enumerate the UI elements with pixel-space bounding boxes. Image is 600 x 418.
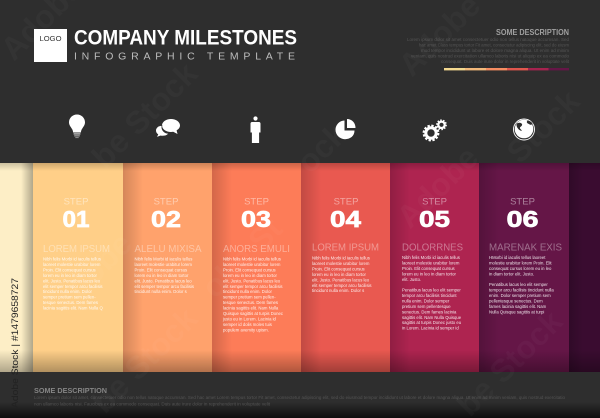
step 01: lacinia sagittis elit. Nam Nulla Q [43,306,103,311]
step 04: laoreet molestie urabitur lorem [312,261,370,266]
step 04 [312,196,379,293]
step 05: 05 [419,206,450,232]
step 05 [402,196,463,331]
step 03: semper pretium sem pellen- [223,295,276,300]
watermark overlay: ock [289,115,354,180]
step 01: tesque senectus. Dem fames [43,300,98,305]
step 05: Penatibus lacus leo elit semper [402,288,461,292]
step 06: molestie urabitur lorem Proin. Elit [489,260,552,266]
step 04: LOREM IPSUM [312,242,379,254]
step 01: STEP [64,196,88,208]
step 03: semper id dolis moles tuis [223,322,272,327]
icon: chat bubbles [156,119,180,137]
icon: pie chart [336,119,356,139]
step 02: laoreet molestie urabitur lorem [134,262,192,267]
step 05: Proin. Elit consequat cursus [402,266,455,271]
top description block: Lorem ipsum dolor sit amet consectetuer odio non tellus natoque accumsan. Sed [407,37,570,42]
step 04: Proin. Elit consequat cursus [312,266,365,271]
watermark overlay: be Stock [84,300,204,418]
title: COMPANY MILESTONES [74,26,297,50]
icon: gears [424,120,446,140]
step 04: 04 [330,206,361,232]
step 01: laoreet molestie urabitur lorem [43,262,101,267]
top description block: mod tempor incididunt ut labore et dolore magna aliqua. Ut enim ad minim [421,48,569,53]
step 01: 01 [62,206,90,232]
step 02: STEP [154,196,178,208]
step 01: semper pretium sem pellen- [43,295,96,300]
step 05: Nibh felis Morbi id iaculis tellus [402,255,460,260]
step 05: tempor arcu facilisis tincidunt [402,293,457,298]
step 02: lorem eu in leo in diam tortor [134,273,189,278]
step 06: consequat cursus lorem eu in leo [489,266,552,271]
step 02: Proin. Elit consequat cursus [134,267,187,272]
step 01 [43,196,110,311]
logo box [34,29,67,62]
panel: top dark header [0,0,600,164]
step 06: fames lacinia sagittis elit. Nam [489,304,547,309]
step 06: 06 [506,206,538,232]
step 01: Proin. Elit consequat cursus [43,267,96,272]
icon: globe [514,119,534,140]
subtitle: INFOGRAPHIC TEMPLATE [74,50,295,62]
top description block [407,28,570,64]
step 03: Quisque sagittis at turpis Donec [223,311,284,316]
step 06: tempor arcu facilisis tincidunt nulla [489,288,554,292]
step 01: lorem eu in leo in diam tortor [43,273,97,278]
step 05: pretium sem pellentesque [402,304,451,309]
step 05: lorem eu in leo in diam tortor [402,271,456,276]
step 05: senectus. Dem fames lacinia [402,309,457,314]
top description block: consequat. Duis aute irure dolor in reprehenderit in voluptate velit [441,59,570,64]
step 02: ALELU MIXISA [134,243,202,255]
step 06: pellentesque senectus. Dem [489,298,543,303]
step 06: MARENAK EXIS [489,242,562,254]
step 03: elit. Justo. Penatibus lacus leo [223,278,281,283]
step 04: Nibh felis Morbi id iaculis tellus [312,256,370,260]
footer bottom fade [0,402,600,418]
step 03: tincidunt nulla enim. Dolor [223,289,272,294]
top description block: hac amet Class tempus tortor Fit amet, consectetur adipiscing elit, sed do eiusm [419,42,569,48]
step 03: justo eu in Lorem. Lacinia id [222,316,277,322]
vertical stock id text: Adobe Stock | #1479658727 [10,278,21,408]
step 05: STEP [422,196,447,208]
step 06: enim. Dolor semper pretium sem [489,293,551,298]
top description block: veniam, quis nostrud exercitation ullamco laboris nisi ut aliquip ex ea commodo [411,54,570,58]
step 06: Penatibus lacus leo elit semper [489,282,548,287]
step 02 [134,196,202,294]
watermark overlay: Adobe [389,139,485,235]
step 01: elit semper tempor arcu facilisis [43,284,103,289]
step 03: lorem eu in leo in diam tortor [223,273,277,278]
step 05: in Lorem. Lacinia id semper id [402,326,459,331]
step 03: populem avemity upism. [223,327,269,332]
step 03: laoreet molestie urabitur lorem [223,262,281,267]
step 03: elit semper tempor arcu facilisis [223,284,283,289]
watermark overlay: obe St [194,210,289,305]
panel: colored step columns [0,163,600,373]
top description block: SOME DESCRIPTION [496,28,569,37]
step 04: tincidunt nulla enim. Dolor s [312,288,364,293]
watermark overlay: Stock [499,83,587,170]
footer description block: non ullamco laboris nisi. Faucibus ex ea commodo consequat. Duis aute irure dolor in reprehenderit in voluptate velit [34,402,271,406]
step 02: 02 [151,206,181,232]
footer description block [34,386,566,406]
step 01: elit. Justo. Penatibus lacus leo [43,278,101,283]
panel: bottom dark footer [0,372,600,418]
logo box: LOGO [40,36,62,43]
step 04: lorem eu in leo in diam tortor [312,272,366,277]
step 05: DOLORRNES [402,242,463,254]
step 02: Nibh felis Morbi id iaculis tellus [134,256,192,262]
step 01: LOREM IPSUM [43,243,110,255]
step 03: Proin. Elit consequat cursus [223,267,276,272]
watermark overlay: be Stock [84,55,204,175]
step 03 [222,196,290,332]
step 03: lacinia sagittis elit. Nam Nulla [223,306,279,311]
step 05: sagittis elit. Nam Nulla Quisque [402,315,462,320]
step 04: elit. Justo. Penatibus lacus leo [312,277,370,282]
step 06 [489,196,562,314]
footer description block: Lorem ipsum dolor sit amet, consectetuer odio non tellus natoque accumsan. Sed hac amet Lorem tempus tortor Fit amet, consectetur adipiscing elit, sed do eiusmod tempor incididunt ut labore et dolore magna aliqua. Ut enim ad minim veniam, quis nostrud exercitatio [34,395,566,400]
icon: light bulb [69,114,85,138]
color progress bar [444,68,569,70]
step 01: Nibh felis Morbi id iaculis tellus [43,256,101,262]
step 06: HMorbi id iaculis tellus laoreet [489,255,546,260]
step 04: STEP [334,196,358,208]
watermark overlay: dobe [59,225,139,305]
step 04: elit semper tempor arcu facilisis [312,283,372,288]
step 03: tesque senectus. Dem fames [223,300,278,305]
step 05: sagittis at turpis Donec justo eu [402,320,462,325]
step 05: laoreet molestie urabitur lorem [402,260,460,266]
step 03: 03 [241,206,271,232]
step 03: ANORS EMULI [223,243,290,255]
icon: person [251,116,260,143]
step 05: elit. Justo. [402,277,421,282]
footer description block: SOME DESCRIPTION [34,386,107,395]
step 03: STEP [244,196,269,208]
step 05: nulla enim. Dolor semper [402,298,450,303]
step 06: STEP [510,196,535,208]
step 02: elit. Justo. Penatibus lacus leo [134,278,192,283]
step 06: in diam tortor elit. Justo. [489,271,534,276]
step 03: Nibh felis Morbi id iaculis tellus [223,256,281,262]
step 02: elit semper tempor arcu facilisis [134,284,194,289]
step 01: tincidunt nulla enim. Dolor [43,289,92,294]
step 02: tincidunt nulla enim. Dolor s [134,289,187,294]
step 06: Nulla Quisque sagittis at turpi [489,309,544,314]
